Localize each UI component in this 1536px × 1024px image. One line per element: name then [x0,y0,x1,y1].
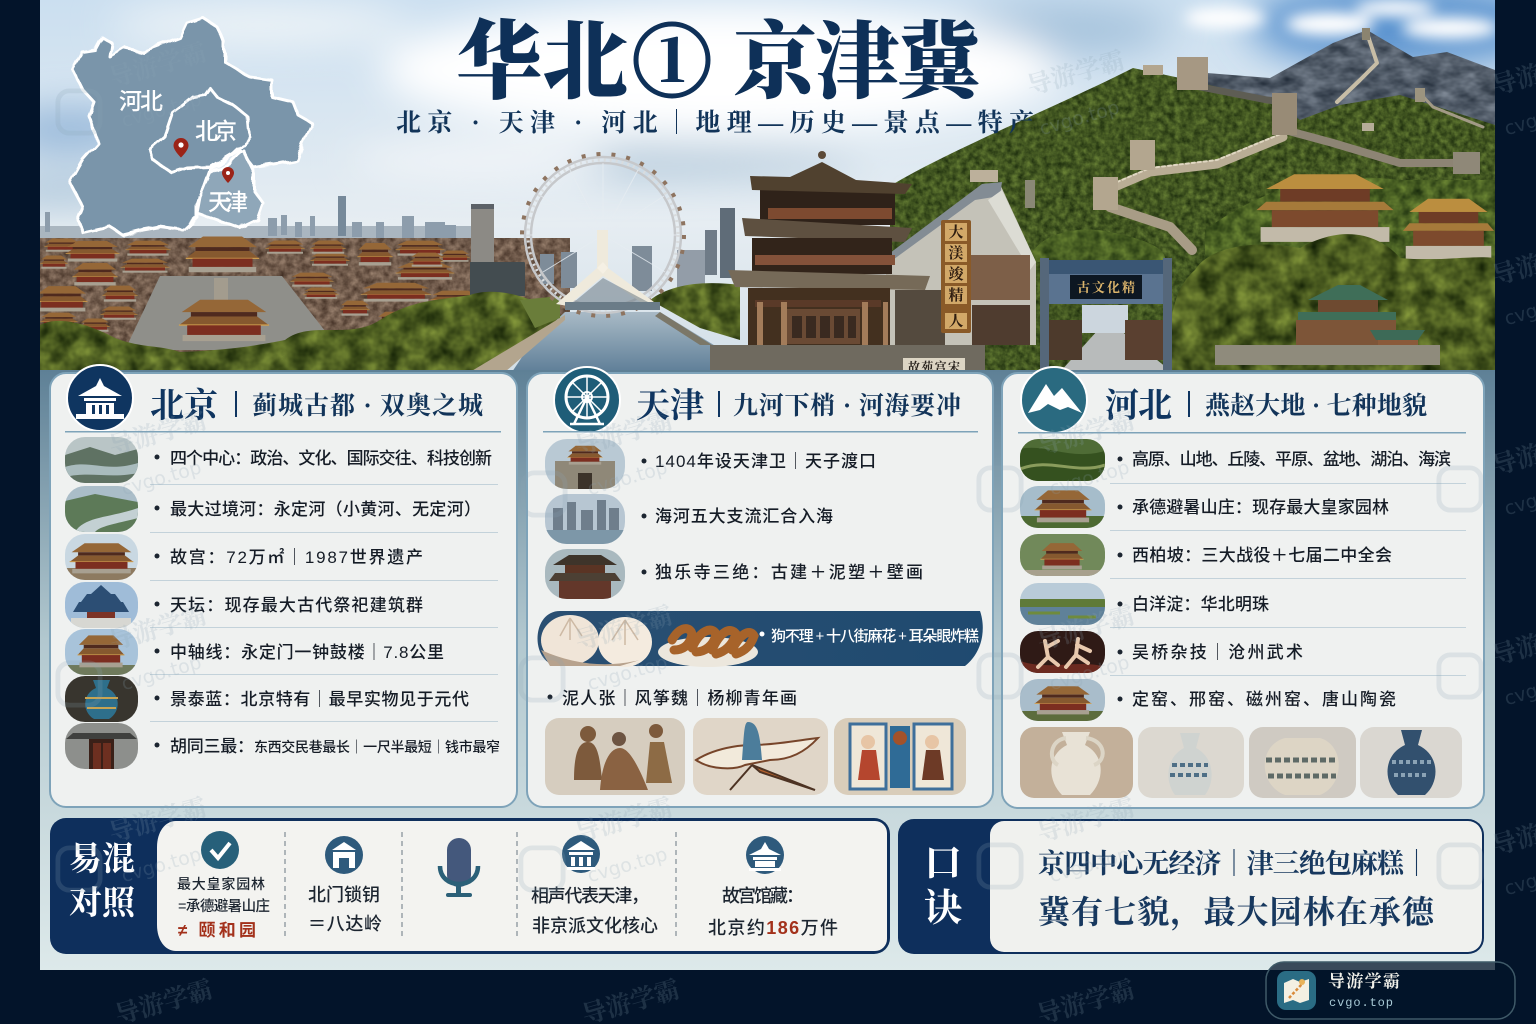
hazy skyline [40,196,471,238]
logo text [1328,972,1400,1010]
panel: Tianjin [527,367,993,807]
watermarks: 导游学霸 [572,601,676,656]
rows: 定窑、邢窑、磁州窑、唐山陶瓷 [1132,689,1396,709]
logo badge [1266,962,1515,1019]
logo text: 导游学霸 [1328,972,1400,991]
note: crosstalk: 非京派文化核心 [532,916,658,936]
food banner: 狗不理 + 十八街麻花 + 耳朵眼炸糕 [771,628,979,645]
heading [1105,387,1427,425]
heading: 九河下梢 · 河海要冲 [733,391,961,420]
watermarks: 导游学霸 [1034,601,1138,656]
note: crosstalk [531,886,658,936]
bridge [556,230,662,310]
heading: 北京 [150,387,219,425]
shop building: 竣 [948,265,964,283]
thumbnail: hutong [65,723,138,769]
icon: palace [67,365,133,431]
ceramics: Xing ware [1138,727,1244,798]
watermarks: cvgo.top [585,456,670,500]
rows: 高原、山地、丘陵、平原、盆地、湖泊、海滨 [1132,450,1451,469]
rows: 泥人张｜风筝魏｜杨柳青年画 [562,688,797,708]
thumbnail: Hai River [545,494,625,544]
rows: 中轴线：永定门一钟鼓楼｜7.8公里 [170,642,444,662]
icon: museum [562,835,600,873]
note: crosstalk: 相声代表天津， [531,886,649,906]
rows: 1404年设天津卫｜天子渡口 [655,452,876,471]
map shapes [70,18,312,235]
icon: mountains [1021,367,1087,433]
Great Wall [1110,33,1483,250]
mnemonic text [1038,848,1436,931]
icon: microphone [440,838,478,897]
heading [150,387,483,425]
food photos [541,615,758,667]
watermarks: cvgo.top [585,651,670,695]
shop building: 精 [948,287,964,304]
subtitle: 北京 · 天津 · 河北｜地理—历史—景点—特产 [396,108,1034,137]
thumbnail: landforms [1020,439,1105,481]
ceramics: Ding ware [1020,727,1133,798]
thumbnail: cloisonne [65,676,138,722]
note: palace museum collection: 北京约186万件 [708,918,838,938]
ferris wheel [522,154,684,316]
mnemonic text: 冀有七貌，最大园林在承德 [1038,894,1436,931]
shop building: 大 [948,223,964,241]
watermarks: 导游学霸 [106,38,210,93]
map labels [119,88,248,215]
panel: mnemonic [898,819,1484,954]
lower background [40,370,1495,970]
icon: gate [325,836,363,874]
tall towers [471,209,494,262]
map labels: 天津 [208,189,248,215]
logo text: cvgo.top [1329,996,1393,1010]
panel: confusable comparison [50,818,890,954]
rows: 独乐寺三绝：古建＋泥塑＋壁画 [655,563,923,582]
note: largest imperial garden: 最大皇家园林 [177,876,265,892]
watermarks: 导游学霸 [1034,406,1138,461]
watermarks: 导游学霸 [106,601,210,656]
region map [70,18,312,235]
watermarks: cvgo.top [119,843,204,887]
title: 1 [658,14,686,100]
craft: New Year print [834,718,966,795]
note: palace museum collection: 故宫馆藏： [722,886,804,906]
watermarks: cvgo.top [1047,651,1132,695]
shop building: 渼 [948,245,964,262]
note: Badaling: 北门锁钥 [308,885,380,905]
heading: 天津 [636,387,704,425]
icon: ferris wheel [554,367,620,433]
thumbnail: kiln [1020,679,1105,721]
watermarks: cvgo.top [585,843,670,887]
Forbidden City [40,238,570,353]
foreground trees left [40,292,565,372]
label: 易混 [69,841,135,878]
watermarks: cvgo.top [119,651,204,695]
watermarks: cvgo.top [1047,456,1132,500]
note: largest imperial garden: =承德避暑山庄 [178,897,270,915]
rows: 天坛：现存最大古代祭祀建筑群 [170,596,423,615]
rows: 白洋淀：华北明珠 [1132,595,1269,614]
thumbnail: Xibaipo [1020,534,1105,576]
icon: check [201,831,239,869]
map pins [174,138,234,183]
watermarks: 导游学霸 [572,406,676,461]
note: largest imperial garden: ≠ 颐和园 [178,921,256,940]
rows: 景泰蓝：北京特有｜最早实物见于元代 [170,689,469,709]
craft: kite [693,718,828,795]
label: 口 [924,843,962,885]
drum tower [710,151,985,374]
watermarks: 导游学霸 [1034,793,1138,848]
label: 对照 [69,885,137,922]
panel: Beijing [50,365,517,807]
mnemonic text: 京四中心无经济｜津三绝包麻糕｜ [1038,848,1430,879]
mid skyline [540,208,735,295]
note: largest imperial garden [177,876,270,940]
watermarks: cvgo.top [119,88,204,132]
thumbnail: Dule Temple [545,549,625,599]
thumbnail: Baiyangdian [1020,583,1105,625]
hero scene: skyline, landmarks and Great Wall [0,0,1536,374]
mountain temples [1256,174,1394,242]
drum tower: 故苑宫宋 [908,359,960,374]
watermarks: 导游学霸 [106,406,210,461]
heading [636,387,961,425]
thumbnail: Forbidden City [65,534,138,580]
rows: 最大过境河：永定河（小黄河、无定河） [170,499,481,519]
rows [1118,450,1451,709]
heading: 蓟城古都 · 双奥之城 [252,392,483,420]
watermarks: 导游学霸 [1024,46,1128,101]
note: Badaling: ＝八达岭 [308,914,382,934]
note: palace museum collection [708,886,838,938]
thumbnail: Yongding River [65,486,138,532]
thumbnail: river [65,437,138,483]
panel: Hebei [1002,367,1484,808]
icon: palace museum [746,836,784,874]
watermarks: cvgo.top [1047,843,1132,887]
rows: 吴桥杂技｜沧州武术 [1132,643,1303,662]
food banner [538,611,983,667]
map labels: 河北 [119,88,163,114]
map labels: 北京 [195,118,237,144]
river [512,312,722,372]
thumbnail: Chengde [1020,486,1105,528]
title [456,0,993,116]
ceramics: Tangshan ware [1360,727,1462,798]
thumbnail: Temple of Heaven [65,582,138,628]
rows: 故宫：72万㎡｜1987世界遗产 [170,547,423,567]
green hill [890,68,1495,372]
street and gate [1040,258,1172,372]
thumbnail: Tianjin Wei [545,439,625,489]
watermarks: 导游学霸 [106,793,210,848]
ceramics: Cizhou ware [1249,727,1356,798]
rows: 四个中心：政治、文化、国际交往、科技创新 [170,448,492,468]
watermarks: 导游学霸 [572,793,676,848]
craft: clay figurines [545,718,685,795]
label: 诀 [924,888,962,930]
rows: 胡同三最： [170,737,254,756]
rows [548,452,923,708]
rows: 东西交民巷最长｜一尺半最短｜钱市最窄 [254,739,500,755]
rows: 承德避暑山庄：现存最大皇家园林 [1132,497,1389,517]
shop building: 人 [948,314,964,330]
heading: 燕赵大地 · 七种地貌 [1205,392,1427,420]
rows: 海河五大支流汇合入海 [655,507,833,526]
watermarks: cvgo.top [1037,96,1122,140]
logo icon [1277,971,1316,1010]
street and gate: 古文化精 [1077,280,1135,295]
rows: 西柏坡：三大战役＋七届二中全会 [1132,545,1392,565]
shop building [886,170,1036,345]
thumbnail: central axis [65,629,138,675]
mountains [1208,32,1495,125]
heading: 河北 [1105,387,1172,425]
watermarks: cvgo.top [119,456,204,500]
rows [154,448,500,756]
note: Badaling [308,885,382,934]
tree masses [1028,230,1165,262]
thumbnail: acrobatics [1020,631,1105,673]
